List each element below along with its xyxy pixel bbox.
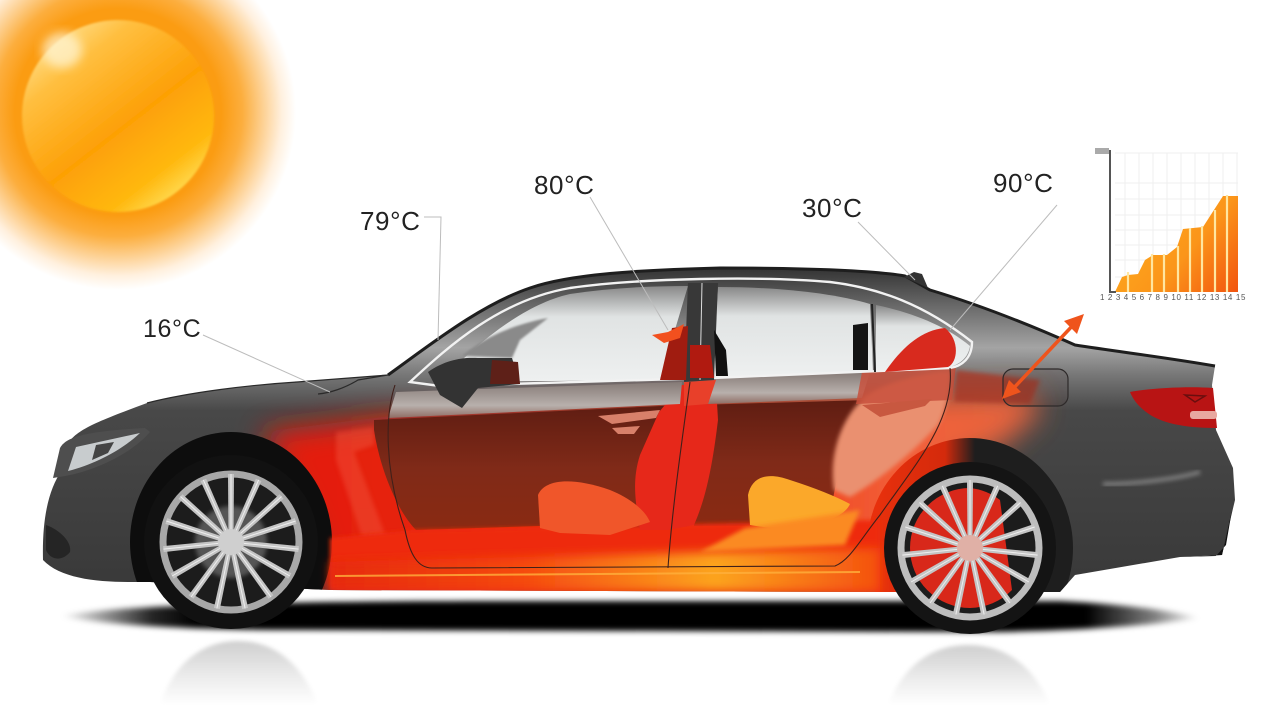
quarter window bbox=[876, 305, 970, 371]
rear diffuser bbox=[1180, 510, 1232, 557]
door panel front bbox=[374, 405, 682, 532]
car bbox=[43, 268, 1235, 658]
steering shadow bbox=[490, 360, 520, 384]
mirror bbox=[428, 358, 520, 408]
label: 30°C: 30°C bbox=[802, 193, 862, 223]
chart axis bbox=[1110, 150, 1116, 292]
antenna fin bbox=[904, 272, 928, 288]
front seat cushion bbox=[538, 481, 650, 535]
label: 79°C: 79°C bbox=[360, 206, 420, 236]
rear wheel bbox=[884, 462, 1056, 634]
rear seat back bbox=[833, 371, 950, 497]
leader lines bbox=[203, 197, 1057, 392]
chart area bbox=[1115, 196, 1238, 292]
window chrome bbox=[410, 279, 972, 386]
lower sill bbox=[330, 520, 880, 592]
front bumper intake bbox=[46, 525, 70, 559]
belt band rear bbox=[708, 372, 870, 404]
front wheel bbox=[144, 455, 318, 629]
car body bbox=[43, 268, 1235, 592]
rear wheel arch bbox=[870, 438, 1073, 592]
windshield wedge bbox=[462, 318, 548, 358]
front window bbox=[440, 286, 688, 382]
tail light bbox=[1130, 387, 1217, 428]
door pillar bbox=[684, 283, 718, 382]
ground shadow bbox=[60, 601, 1200, 632]
front wheel arch bbox=[130, 432, 332, 590]
fender inner detail bbox=[336, 427, 386, 537]
door panel rear bbox=[694, 400, 868, 526]
door handles bbox=[598, 399, 932, 434]
label: 16°C: 16°C bbox=[143, 315, 201, 343]
chart bbox=[1095, 148, 1246, 302]
belt band front bbox=[388, 382, 682, 418]
rear seat cushion bbox=[748, 476, 850, 528]
flame marker bbox=[652, 324, 684, 343]
headlight bbox=[53, 428, 150, 478]
arrow bbox=[1002, 314, 1084, 399]
label: 80°C: 80°C bbox=[534, 170, 594, 200]
hood crease bbox=[147, 375, 388, 403]
door seams bbox=[388, 368, 950, 568]
label: 90°C: 90°C bbox=[993, 168, 1054, 198]
red seat through glass bbox=[660, 326, 688, 380]
chart grid bbox=[1115, 153, 1238, 292]
heat overlay bbox=[130, 367, 1073, 592]
wheel reflections bbox=[160, 641, 1050, 705]
chart x labels: 1 2 3 4 5 6 7 8 9 10 11 12 13 14 15 bbox=[1100, 293, 1246, 302]
rear window bbox=[712, 287, 873, 378]
roof edge bbox=[388, 268, 1215, 375]
front seat back bbox=[635, 385, 718, 530]
sun bbox=[0, 0, 296, 290]
body highlight rear bbox=[1103, 472, 1200, 484]
chart axis cap bbox=[1095, 148, 1109, 154]
rear headrest bbox=[885, 328, 956, 372]
chart stripes bbox=[1128, 195, 1227, 292]
fuel door bbox=[1003, 369, 1068, 406]
